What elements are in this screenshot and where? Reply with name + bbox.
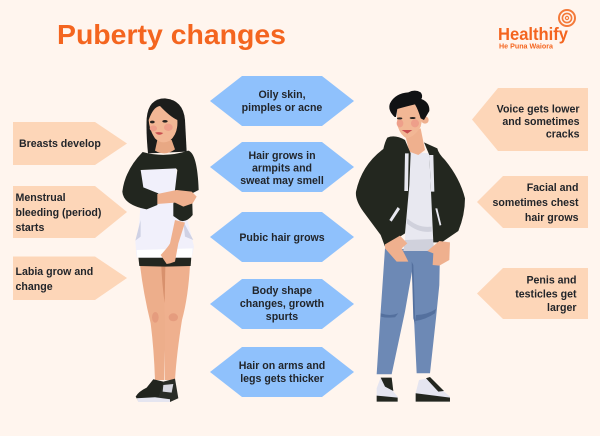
- legs: [140, 265, 166, 380]
- arrow label: body shape: changes, growth: [240, 298, 324, 310]
- arrow label: oily skin: Oily skin,: [258, 89, 306, 101]
- hair back: [146, 98, 187, 153]
- arm: [157, 190, 197, 207]
- logo: Healthify: [498, 10, 575, 50]
- icon: logo rings: [559, 10, 575, 26]
- arrow label: voice: [472, 88, 588, 151]
- logo: Healthify: Healthify: [498, 24, 568, 44]
- arrow label: hair armpits: Hair grows in: [248, 150, 316, 162]
- arrow label: penis: Penis and: [526, 274, 576, 286]
- title: Puberty changes: [57, 19, 286, 50]
- arrow label: labia: change: [16, 281, 53, 293]
- arrow label: hair on arms: legs gets thicker: [240, 373, 324, 385]
- hair: [389, 91, 429, 120]
- panel: shared changes: [210, 76, 354, 397]
- arrow label: hair armpits: armpits and: [252, 162, 312, 174]
- arrow label: labia: Labia grow and: [16, 266, 93, 278]
- arrow label: body shape: [210, 279, 354, 329]
- arrow label: breasts develop: [13, 122, 127, 165]
- arrow label: menstrual bleeding: starts: [16, 222, 44, 234]
- jeans: [377, 248, 440, 374]
- arrow label: penis: testicles get: [515, 288, 577, 300]
- arrow label: hair armpits: [210, 142, 354, 192]
- neck: [155, 140, 175, 153]
- arrow label: menstrual bleeding: bleeding (period): [16, 207, 101, 219]
- arrow label: menstrual bleeding: [13, 186, 127, 238]
- arrow label: body shape: spurts: [266, 311, 298, 323]
- arrow label: penis: [477, 268, 588, 319]
- tee: [405, 152, 433, 242]
- face: [149, 106, 177, 142]
- shoes: [377, 378, 398, 402]
- panel: male changes: [472, 88, 588, 319]
- arrow label: facial hair: sometimes chest: [493, 197, 579, 209]
- arrow label: menstrual bleeding: Menstrual: [16, 192, 66, 204]
- logo: Healthify: He Puna Waiora: [499, 42, 554, 50]
- arrow label: pubic hair: Pubic hair grows: [239, 232, 325, 244]
- arrow label: body shape: Body shape: [252, 285, 312, 297]
- sweater dark: [122, 151, 199, 221]
- shorts: [138, 257, 191, 267]
- arrow label: oily skin: [210, 76, 354, 126]
- face: [397, 102, 422, 138]
- illustration: boy: [356, 91, 465, 402]
- arrow label: pubic hair: [210, 212, 354, 262]
- arrow label: labia: [13, 256, 127, 300]
- hoodie: [356, 136, 411, 247]
- arrow label: hair armpits: sweat may smell: [240, 175, 324, 187]
- arrow label: voice: cracks: [546, 128, 580, 140]
- panel: female changes: [13, 122, 127, 300]
- arrow label: oily skin: pimples or acne: [242, 102, 322, 114]
- arrow label: facial hair: hair grows: [525, 212, 579, 224]
- hands: [385, 236, 408, 262]
- top white: [135, 168, 194, 258]
- shoes: [136, 379, 165, 401]
- neck: [404, 128, 425, 155]
- illustration: girl: [122, 98, 199, 402]
- arrow label: hair on arms: [210, 347, 354, 397]
- arrow label: facial hair: Facial and: [527, 182, 578, 194]
- arrow label: breasts develop: Breasts develop: [19, 138, 101, 150]
- arrow label: facial hair: [477, 176, 588, 228]
- arrow label: voice: and sometimes: [502, 116, 580, 128]
- arrow label: penis: larger: [547, 302, 576, 314]
- arrow label: voice: Voice gets lower: [497, 104, 580, 116]
- arrow label: hair on arms: Hair on arms and: [239, 360, 325, 372]
